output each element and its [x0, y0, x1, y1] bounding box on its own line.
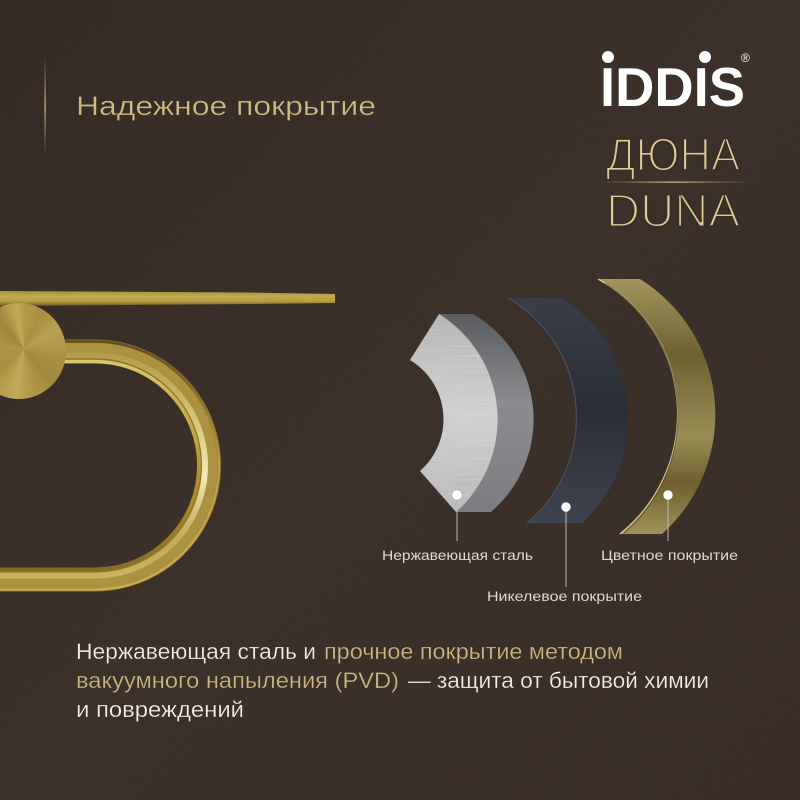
logo: IDDIS: ® — [741, 51, 750, 65]
coating layer: nickel — [508, 298, 628, 523]
description text: — защита от бытовой химии — [408, 668, 709, 693]
description text — [76, 639, 709, 722]
product: gold towel ring — [0, 342, 219, 590]
series name: Дюна / Duna: DUNA — [606, 184, 740, 236]
description text: Нержавеющая сталь и — [76, 639, 316, 664]
logo: IDDIS: IDDIS — [600, 56, 745, 118]
description text: и повреждений — [76, 697, 244, 722]
description text: прочное покрытие методом — [324, 639, 623, 664]
callout: stainless steel — [382, 490, 533, 563]
coating layer: colored PVD — [598, 279, 715, 534]
description text: вакуумного напыления (PVD) — [76, 668, 399, 693]
title: Надежное покрытие — [76, 91, 376, 121]
callout: nickel: Никелевое покрытие — [487, 588, 642, 604]
series name: Дюна / Duna — [597, 128, 751, 236]
coating layer: stainless steel — [405, 310, 534, 515]
callout: colored coating: Цветное покрытие — [601, 547, 738, 563]
product: shelf — [0, 291, 335, 306]
callout: stainless steel: Нержавеющая сталь — [382, 547, 533, 563]
decorative heading rule — [44, 56, 46, 156]
callout: colored coating — [601, 490, 738, 563]
callout: nickel — [487, 502, 642, 604]
series name: Дюна / Duna: ДЮНА — [606, 128, 740, 180]
product: round wall mount — [0, 303, 66, 399]
